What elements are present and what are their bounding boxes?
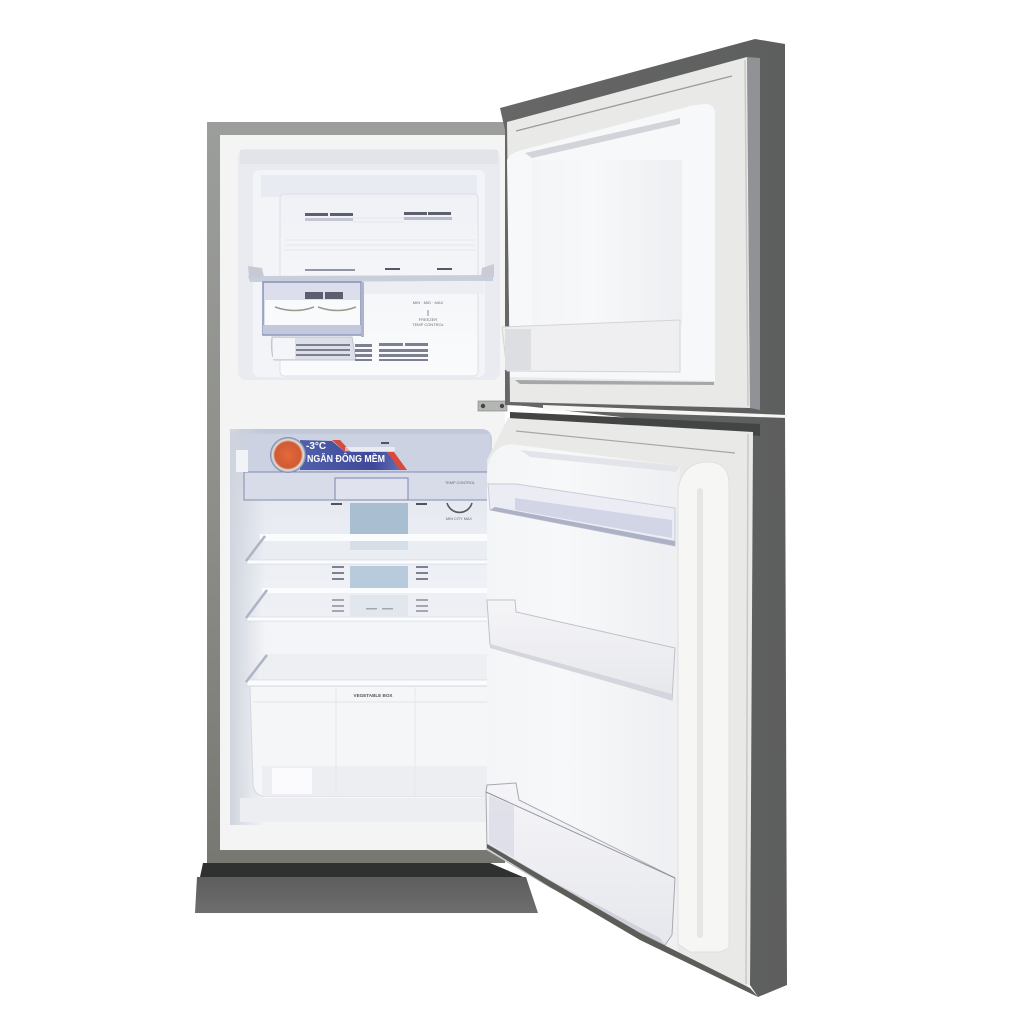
- temperature dial: TEMP CONTROL: [445, 481, 475, 485]
- freezer shelf: [248, 264, 494, 294]
- lower door bottom edge: [487, 844, 758, 997]
- freezer control label: FREEZER: [419, 317, 437, 322]
- lower door bin bottom: [486, 783, 675, 945]
- freezing label banner: NGĂN ĐÔNG MỀM: [307, 452, 385, 465]
- freezer cavity: [238, 149, 500, 380]
- freezing label banner: [270, 437, 407, 473]
- fridge cavity: [230, 429, 492, 825]
- freezer control label: TEMP CONTROL: [412, 322, 445, 327]
- upper door bin: [502, 320, 680, 372]
- fridge cabinet: [207, 122, 505, 863]
- chill drawer: [236, 434, 490, 505]
- upper door: [500, 39, 785, 418]
- plinth base: [195, 863, 538, 913]
- freezer control label: MIN · MID · MAX: [413, 300, 444, 305]
- lower door gasket: [487, 418, 753, 987]
- fridge compartment: [230, 429, 492, 825]
- freezer back panel: [280, 194, 478, 376]
- vegetable box: [250, 686, 489, 796]
- door column: [678, 462, 729, 952]
- upper door grey edge: [747, 57, 760, 410]
- lower door dark shell: [508, 404, 787, 997]
- vegetable box: VEGETABLE BOX: [354, 693, 393, 698]
- freezer compartment: [238, 149, 500, 380]
- hinge: [478, 401, 507, 411]
- lower door panel: [487, 444, 680, 952]
- lower freezer vents: [296, 343, 428, 361]
- freezing label banner: -3°C: [306, 441, 326, 452]
- fridge shelves: [246, 534, 488, 686]
- upper door panel: [507, 104, 715, 381]
- back vents: [332, 566, 428, 612]
- lower door bin middle: [487, 600, 675, 700]
- blue back panels: [350, 503, 408, 550]
- temperature dial: [445, 481, 475, 521]
- upper door gasket: [507, 57, 750, 408]
- ice box: [263, 282, 364, 337]
- freezer control label: [412, 300, 445, 327]
- lower door: [486, 404, 787, 997]
- ice tray: [271, 337, 356, 360]
- upper door dark shell: [500, 39, 785, 418]
- door seam highlight: [543, 405, 787, 418]
- temperature dial: MIN CITY MAX: [446, 517, 472, 521]
- lower door bin top: [488, 484, 675, 546]
- freezer vents: [305, 212, 452, 271]
